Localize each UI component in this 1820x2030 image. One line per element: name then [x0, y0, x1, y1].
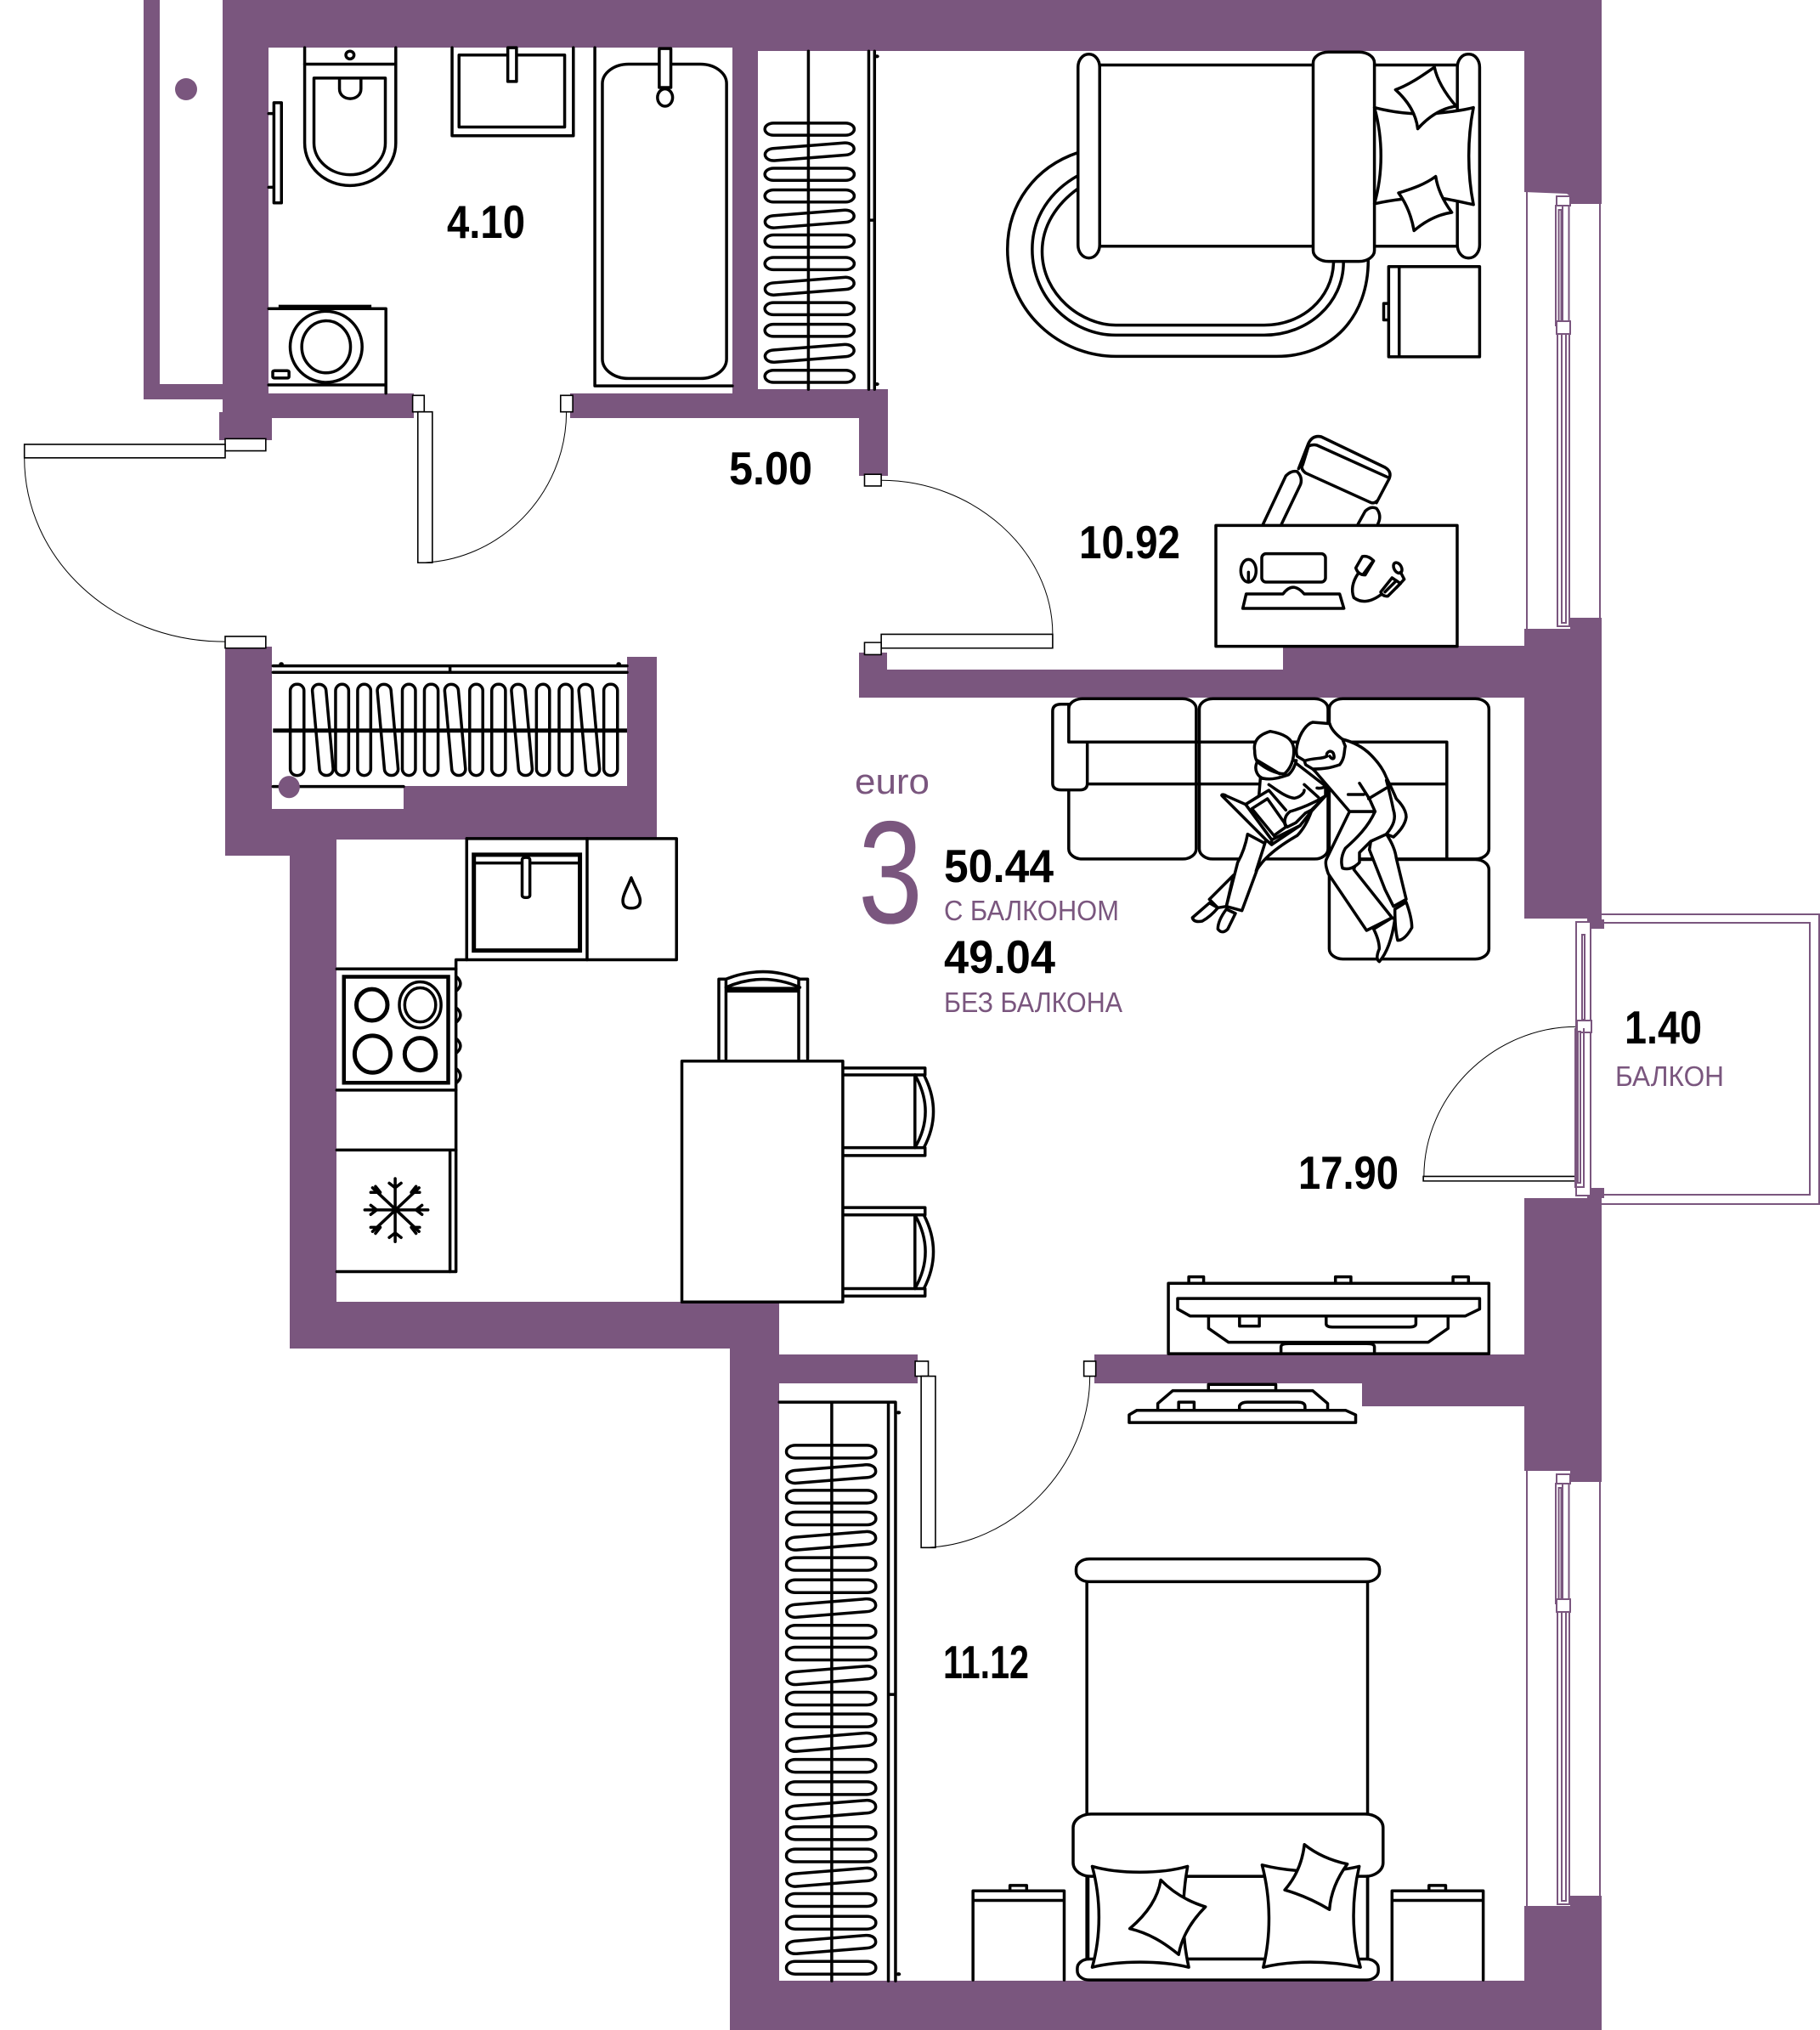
dining chair right one [843, 1068, 934, 1156]
man [1297, 722, 1412, 962]
dining chair top [719, 972, 808, 1059]
entrance door [25, 438, 266, 648]
area label: hall: 5.00 [729, 442, 812, 495]
total area without balcony: 49.04 [944, 930, 1055, 983]
bedroom one furniture [1008, 52, 1479, 357]
icon: snowflake fridge [365, 1179, 428, 1241]
sofa [1053, 698, 1489, 959]
balcony caption: БАЛКОН [1615, 1060, 1724, 1092]
nightstand [1384, 267, 1479, 357]
wardrobe coils bottom [779, 1402, 901, 1981]
total area with balcony: 50.44 [944, 840, 1054, 892]
kitchen counter [336, 839, 676, 1271]
bed [1073, 1559, 1383, 1980]
people on sofa [1192, 722, 1412, 962]
caption without balcony: БЕЗ БАЛКОНА [944, 987, 1122, 1018]
area label: bathroom: 4.10 [447, 195, 525, 248]
washbasin [452, 48, 574, 136]
living room furniture [1053, 698, 1577, 1354]
balcony area: 1.40 [1625, 1001, 1702, 1054]
balcony outline [1591, 914, 1819, 1204]
bathroom fixtures [25, 48, 879, 648]
tv [1129, 1384, 1356, 1422]
balcony door leaf [1423, 1026, 1577, 1181]
office chair [1263, 437, 1390, 524]
kitchen and hall furniture [273, 662, 934, 1302]
towel rail [268, 103, 281, 203]
window bedroom two [1527, 1470, 1600, 1907]
dining chair right two [843, 1207, 934, 1296]
desk and office chair [1216, 437, 1457, 647]
area label: bedroom two: 11.12 [943, 1636, 1029, 1688]
dining table [682, 1061, 843, 1302]
bedroom one door [864, 474, 1053, 654]
bathtub [595, 48, 732, 386]
toilet [305, 48, 396, 185]
hall wardrobe [273, 662, 627, 787]
balcony door frame [1575, 922, 1591, 1196]
icon: riser dot [279, 776, 300, 798]
desk with computer [1216, 525, 1457, 647]
caption with balcony: С БАЛКОНОМ [944, 895, 1119, 926]
area label: bedroom one: 10.92 [1079, 516, 1180, 568]
rug [1008, 153, 1368, 356]
nightstand right [1392, 1886, 1484, 1980]
brand label: euro [855, 761, 930, 801]
woman [1192, 732, 1325, 932]
area label: living room: 17.90 [1298, 1146, 1399, 1199]
icon: riser dot [175, 78, 197, 100]
wardrobe coils top [764, 51, 879, 389]
bathroom door [413, 395, 573, 563]
nightstand left [973, 1886, 1064, 1980]
bed [1078, 52, 1479, 262]
bedroom door [915, 1361, 1096, 1547]
tv console [1168, 1277, 1489, 1354]
room count: 3 [858, 791, 923, 954]
icon: water drop [623, 878, 640, 908]
window bedroom one [1527, 192, 1600, 629]
hob [344, 977, 461, 1083]
kitchen sink [474, 855, 580, 951]
washing machine [268, 305, 386, 393]
bedroom two furniture [779, 1361, 1484, 1981]
